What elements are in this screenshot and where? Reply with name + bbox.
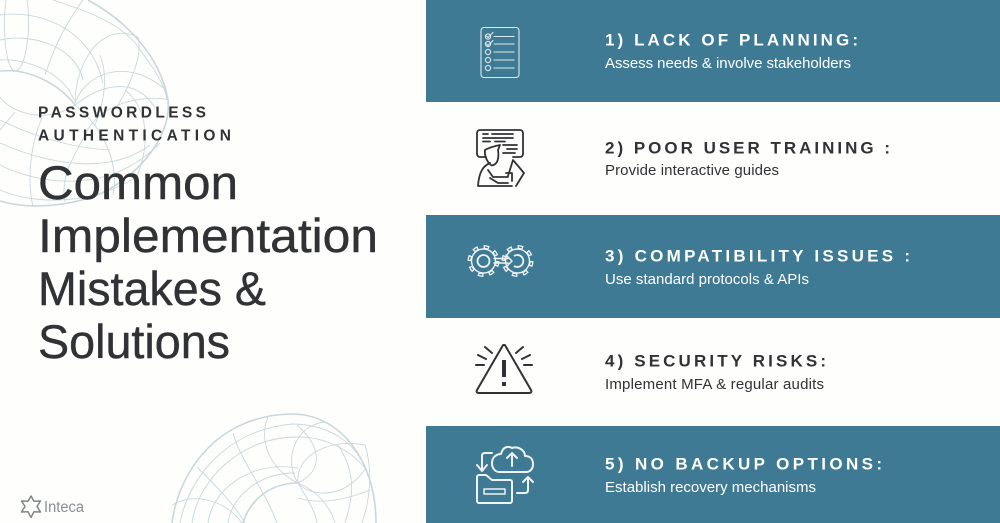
eyebrow heading [38, 104, 231, 144]
panel: item 5: 5) NO BACKUP OPTIONS: [605, 454, 882, 474]
panel: item 3 [426, 215, 1000, 318]
panel: item 3: 3) COMPATIBILITY ISSUES : [605, 246, 910, 266]
panel: item 2: Provide interactive guides [605, 162, 779, 179]
panel: item 5 [426, 426, 1000, 523]
gear: left [470, 247, 498, 275]
icon: warning triangle [476, 345, 532, 393]
logo: Inteca: Inteca [44, 499, 84, 516]
panel: item 4: 4) SECURITY RISKS: [605, 352, 826, 370]
gear: right [504, 247, 532, 275]
panel: item 1: 1) LACK OF PLANNING: [605, 30, 858, 50]
icon: gears with arrow [470, 247, 532, 275]
panel: item 1 [426, 0, 1000, 102]
panel: item 1: Assess needs & involve stakeholders [605, 55, 851, 72]
arrow between gears [494, 255, 512, 267]
eyebrow heading: PASSWORDLESS [38, 104, 206, 122]
panel: item 2 [477, 130, 890, 186]
logo: Inteca [22, 496, 84, 518]
eyebrow heading: AUTHENTICATION [38, 128, 231, 144]
main title: Mistakes & [38, 262, 266, 315]
panel: item 5: Establish recovery mechanisms [605, 479, 816, 496]
icon: person at computer [477, 130, 524, 186]
panel: item 4 [476, 345, 826, 393]
icon: cloud and folder backup [477, 447, 533, 503]
panel: item 4: Implement MFA & regular audits [605, 376, 824, 393]
main title: Common [38, 156, 238, 209]
icon: checklist [481, 28, 519, 78]
main title [38, 156, 378, 368]
panel: item 2: 2) POOR USER TRAINING : [605, 138, 890, 158]
decorative torus: top left [0, 0, 168, 207]
panel: item 3: Use standard protocols & APIs [605, 271, 809, 288]
decorative torus: bottom centre [172, 414, 376, 523]
main title: Solutions [38, 315, 230, 368]
main title: Implementation [38, 209, 378, 262]
